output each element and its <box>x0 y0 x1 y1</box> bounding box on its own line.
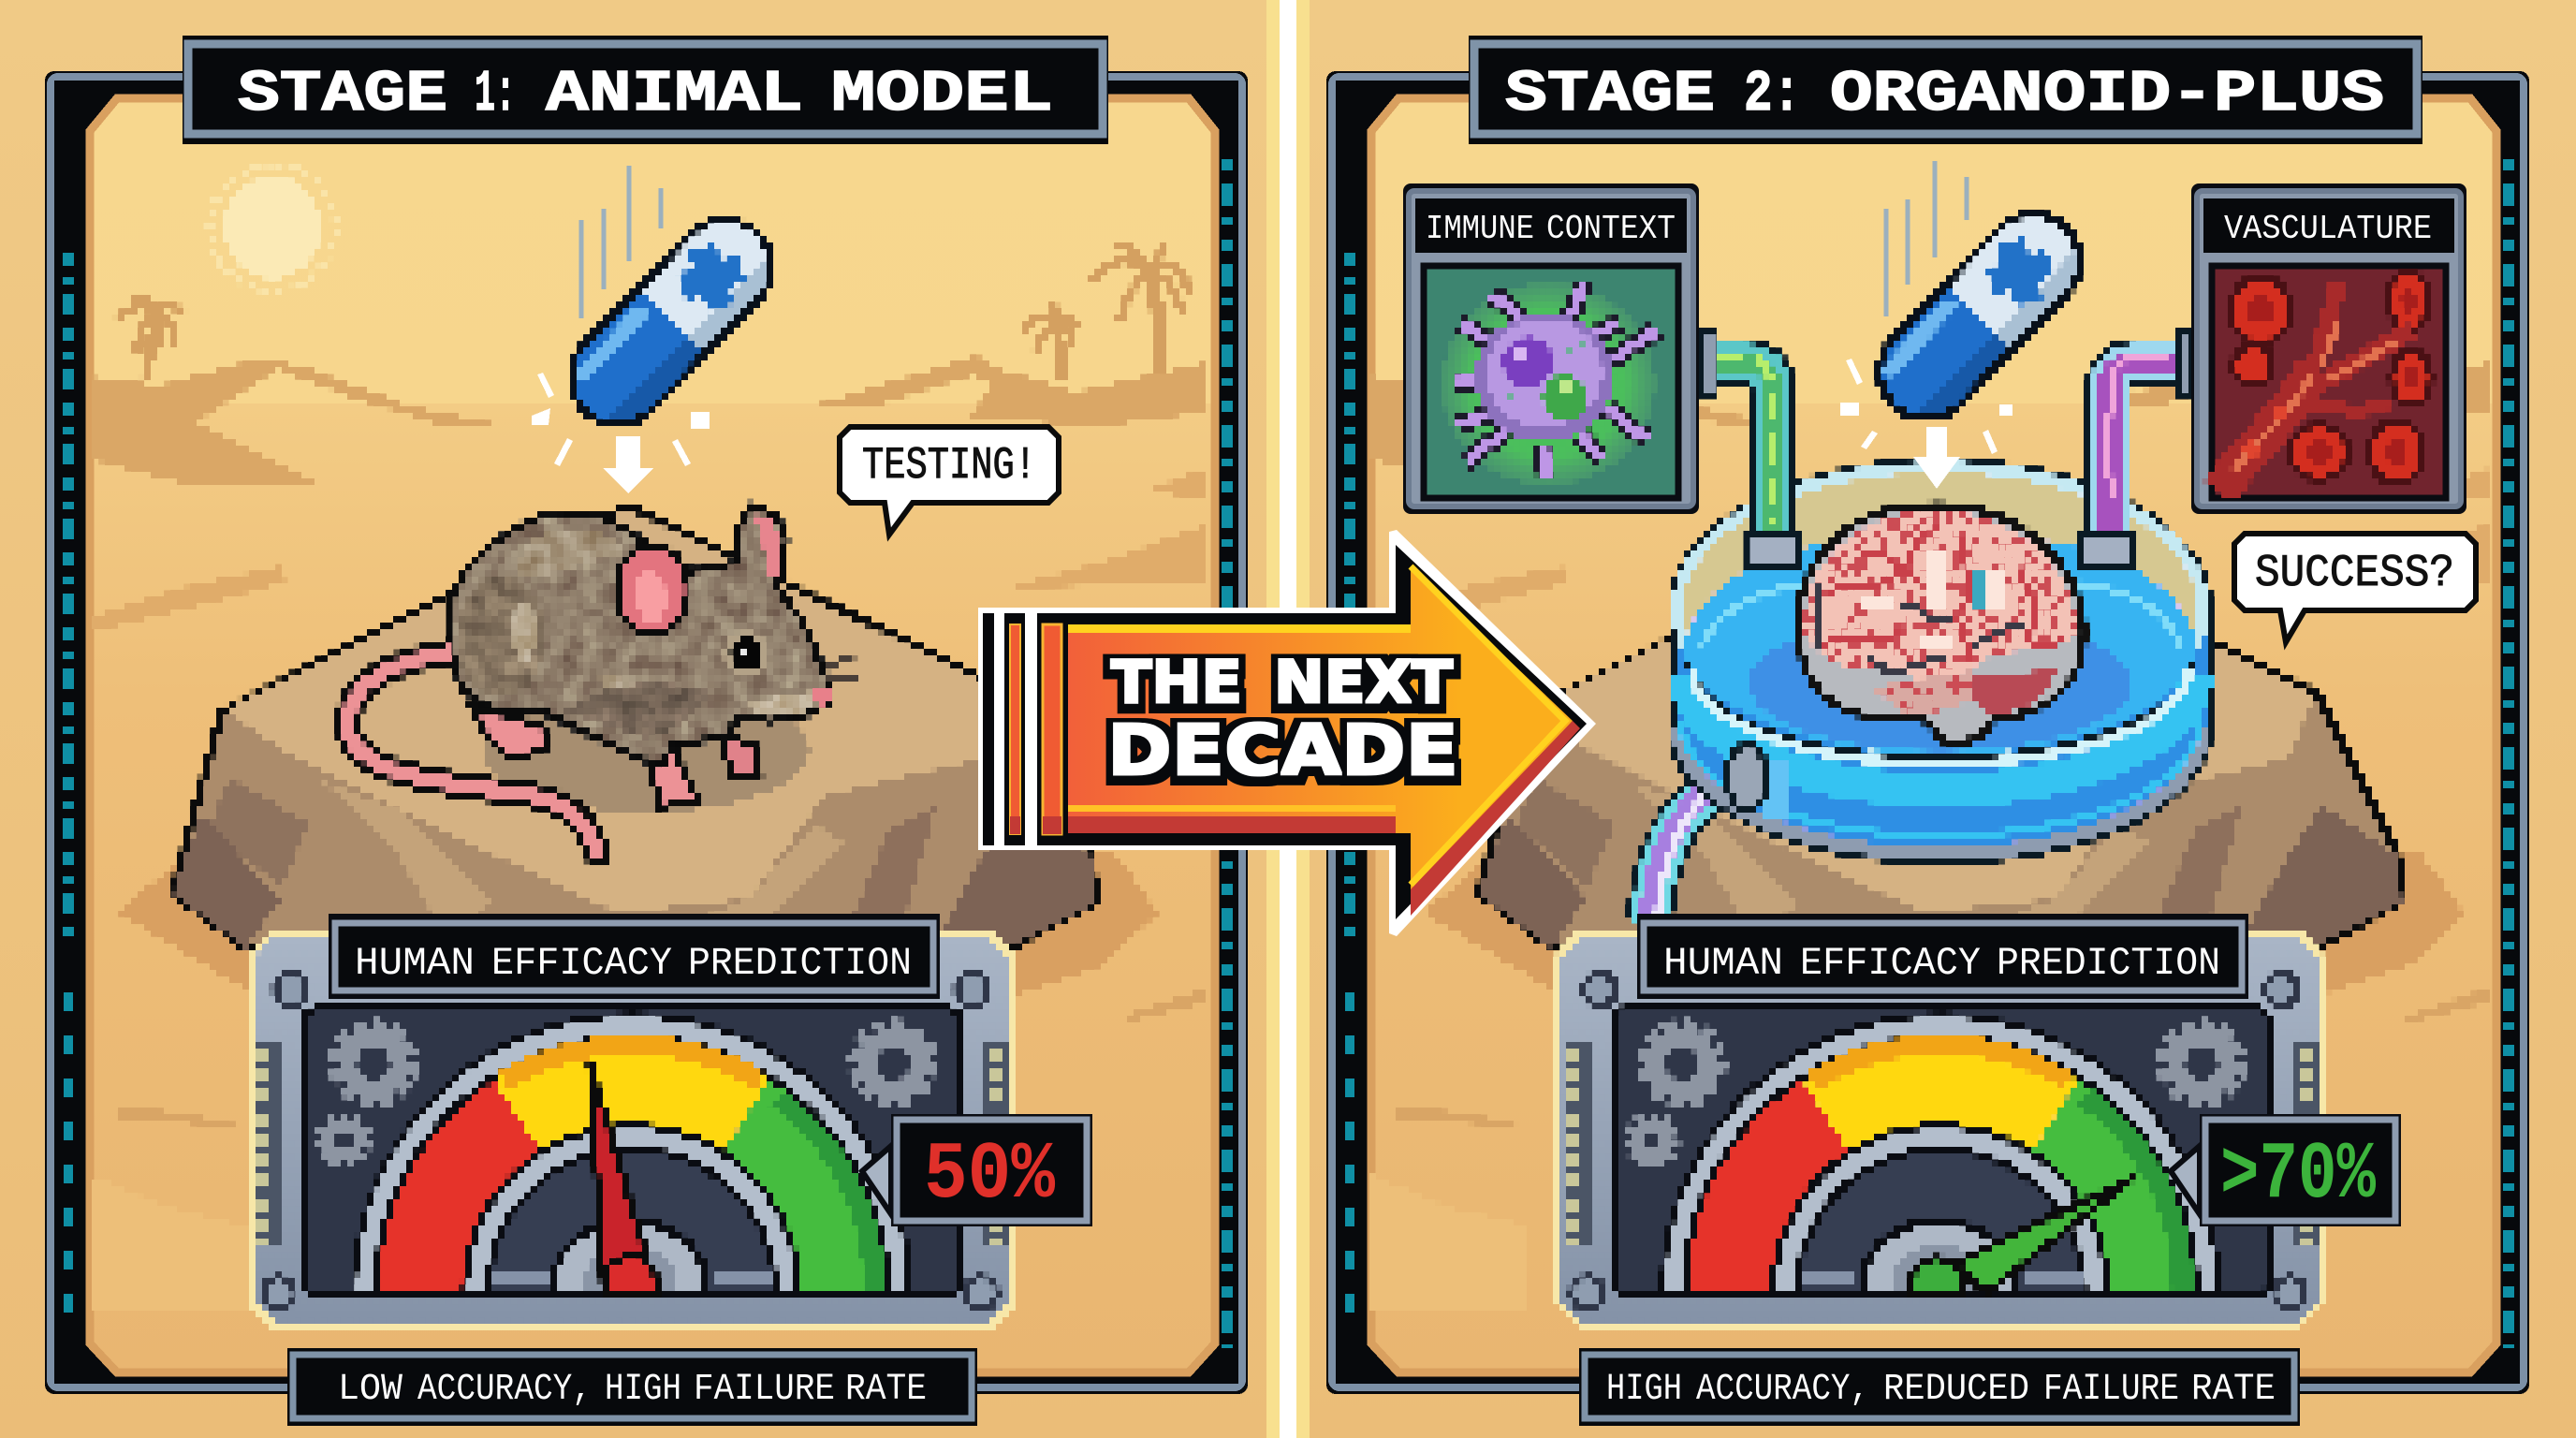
module frame <box>2191 183 2466 514</box>
gauge label <box>1637 914 2248 999</box>
panel: stage 1 animal model <box>45 36 1248 1426</box>
gauge label: PREDICTION <box>688 941 912 986</box>
rock platform <box>119 506 1158 994</box>
speech bubble: testing: TESTING! <box>862 441 1036 492</box>
pill <box>1860 195 2100 438</box>
title plate: stage 2: 2: <box>1744 61 1801 127</box>
pill <box>551 200 791 444</box>
gauge body <box>1559 934 2320 1325</box>
percent readout <box>2171 1114 2401 1226</box>
title plate: stage 2: ORGANOID-PLUS <box>1830 61 2384 127</box>
speech bubble: testing <box>840 427 1059 535</box>
tube: vasculature link <box>2080 330 2192 565</box>
module: vasculature <box>2191 183 2466 514</box>
gauge label: HUMAN <box>1663 941 1783 986</box>
petri dish with brain organoid <box>1672 330 2209 861</box>
percent readout: >70% <box>2220 1129 2376 1221</box>
gauge needle <box>590 1064 657 1293</box>
caption plate: stage 1 <box>287 1348 977 1426</box>
caption plate: stage 1: FAILURE <box>694 1369 835 1411</box>
arrow text: THE <box>1111 648 1242 716</box>
title plate: stage 2 <box>1469 36 2422 144</box>
brain <box>1798 506 2084 742</box>
caption plate: stage 1: HIGH <box>605 1369 681 1411</box>
mouse <box>348 506 859 854</box>
title plate: stage 1: MODEL <box>831 61 1053 127</box>
gauge label <box>329 914 940 999</box>
gauge label: EFFICACY <box>491 941 672 986</box>
falling capsule <box>551 166 791 444</box>
arrow text: DECADE <box>1107 711 1458 791</box>
desert background <box>90 165 1208 1311</box>
falling capsule <box>1860 161 2100 438</box>
caption plate: stage 1: RATE <box>845 1369 927 1411</box>
arrow text <box>1107 648 1458 791</box>
motion lines <box>1886 161 1967 316</box>
caption plate: stage 2: REDUCED <box>1883 1369 2029 1411</box>
title plate: stage 2: STAGE <box>1505 61 1715 127</box>
gauge panel: over 70% <box>1559 914 2401 1325</box>
caption plate: stage 1: LOW <box>338 1369 402 1411</box>
gauge needle <box>1911 1178 2133 1293</box>
big arrow: the next decade <box>978 530 1596 936</box>
module frame <box>1403 183 1699 514</box>
gauge label: HUMAN <box>355 941 475 986</box>
module label: CONTEXT <box>1546 210 1676 248</box>
arrow text: NEXT <box>1274 648 1453 716</box>
module label: IMMUNE <box>1426 210 1534 248</box>
title plate: stage 1: 1: <box>475 61 516 127</box>
panel frame <box>45 71 1248 1394</box>
module label: VASCULATURE <box>2224 210 2432 248</box>
dish body <box>1672 462 2209 861</box>
caption plate: stage 2 <box>1579 1348 2300 1426</box>
percent readout: 50% <box>924 1129 1055 1221</box>
tube: immune link <box>1703 330 1798 565</box>
caption plate: stage 2: RATE <box>2191 1369 2276 1411</box>
gauge panel: 50% <box>250 914 1092 1325</box>
bottom tube <box>1649 770 1743 922</box>
panel frame <box>1326 71 2529 1394</box>
module: immune context <box>1403 183 1699 514</box>
desert background <box>1371 356 2489 1311</box>
title plate: stage 1 <box>183 36 1108 144</box>
caption plate: stage 2: FAILURE <box>2043 1369 2179 1411</box>
speech bubble: success <box>2234 534 2476 642</box>
center divider <box>1266 0 1310 1438</box>
speech bubble: success: SUCCESS? <box>2255 549 2454 599</box>
caption plate: stage 1: ACCURACY, <box>417 1369 592 1411</box>
impact sparkles and down arrow <box>532 373 710 493</box>
motion lines <box>581 166 661 318</box>
gauge label: EFFICACY <box>1800 941 1981 986</box>
blood vessel and cells <box>2219 271 2431 492</box>
panel: stage 2 organoid-plus <box>1326 36 2529 1426</box>
title plate: stage 1: ANIMAL <box>546 61 803 127</box>
impact sparkles and down arrow <box>1840 359 2012 489</box>
gauge body <box>250 934 1012 1325</box>
arrow body <box>978 530 1596 936</box>
caption plate: stage 2: ACCURACY, <box>1696 1369 1869 1411</box>
gauge label: PREDICTION <box>1997 941 2220 986</box>
rock platform <box>1425 506 2464 994</box>
immune cell <box>1442 283 1657 485</box>
title plate: stage 1: STAGE <box>238 61 447 127</box>
caption plate: stage 2: HIGH <box>1606 1369 1682 1411</box>
percent readout <box>862 1114 1092 1226</box>
